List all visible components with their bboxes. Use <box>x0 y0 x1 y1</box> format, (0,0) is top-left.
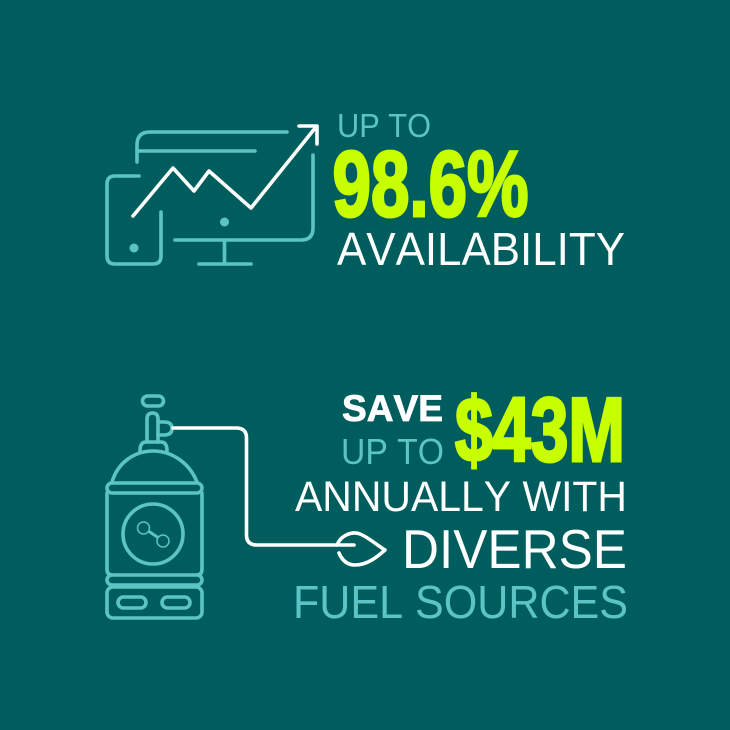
cylinder body <box>107 451 202 618</box>
panel: fuel savings stat <box>107 380 628 628</box>
icon: mobile phone <box>107 176 161 264</box>
text: up to: UP TO <box>337 107 431 144</box>
icon: devices with rising chart <box>107 126 317 264</box>
icon: gas cylinder <box>107 396 202 618</box>
text: diverse: DIVERSE <box>402 518 627 580</box>
text: 98.6% figure: 98.6% <box>332 132 528 236</box>
molecule badge <box>123 504 183 564</box>
text: $43M figure: $43M <box>455 380 625 481</box>
panel: availability stat <box>107 107 625 275</box>
cylinder valve <box>140 396 172 451</box>
text: fuel sources: FUEL SOURCES <box>293 576 628 628</box>
text: up to: UP TO <box>341 431 444 472</box>
text: availability: AVAILABILITY <box>337 223 625 275</box>
arrow: rising trend line <box>133 126 317 216</box>
text: annually with: ANNUALLY WITH <box>295 473 627 521</box>
text: save: SAVE <box>342 388 443 429</box>
icon: leaf <box>337 533 385 565</box>
icon: desktop monitor <box>137 132 313 264</box>
arrow: white fuel pipe <box>173 428 354 545</box>
